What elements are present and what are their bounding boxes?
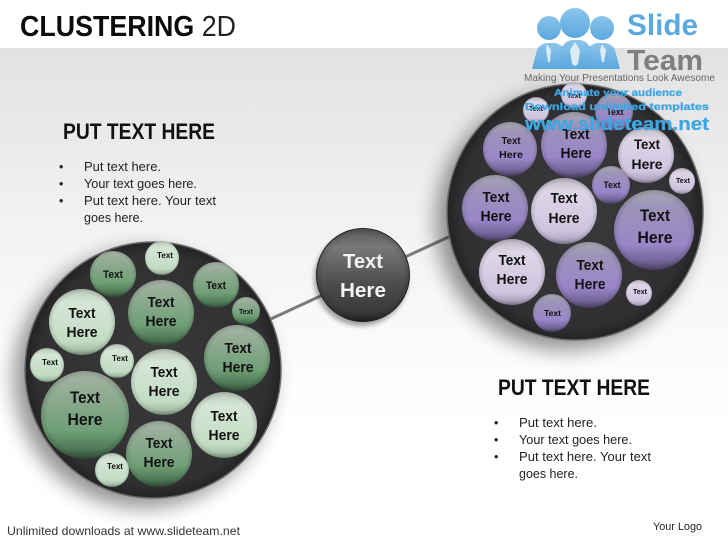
bubble: Text <box>562 126 590 143</box>
bubble: Here <box>68 410 102 429</box>
bubble: Text <box>640 206 670 225</box>
bubble <box>131 349 197 415</box>
bullet list: • <box>494 433 498 447</box>
bubble: Here <box>499 149 523 161</box>
bubble: Text <box>676 176 690 185</box>
bullet list: Put text here. <box>519 416 597 430</box>
bubble <box>523 97 549 123</box>
bubble <box>533 294 571 332</box>
hub circle: Here <box>340 280 386 302</box>
bubble: Text <box>112 353 128 363</box>
bubble: Text <box>502 135 521 147</box>
bubble: Text <box>633 287 647 296</box>
bullet list: Your text goes here. <box>519 433 632 447</box>
watermark text: Animate your audience <box>554 87 682 99</box>
bubble <box>128 280 194 346</box>
bubble <box>204 325 270 391</box>
bubble <box>592 166 630 204</box>
bubble: Here <box>496 271 528 288</box>
bubble: Here <box>632 156 663 172</box>
bubble: Here <box>548 210 580 227</box>
bubble: Here <box>574 276 606 293</box>
bullet list: Your text goes here. <box>84 177 197 191</box>
bubble <box>126 421 192 487</box>
bubble <box>95 453 129 487</box>
bubble <box>561 82 587 108</box>
bubble <box>483 122 537 176</box>
heading: PUT TEXT HERE <box>63 119 215 144</box>
bubble: Here <box>148 383 180 400</box>
watermark text <box>524 87 709 134</box>
bubble: Text <box>103 269 123 281</box>
bubble: Text <box>210 408 238 425</box>
bubble <box>626 280 652 306</box>
bubble: Text <box>68 305 96 322</box>
bubble <box>41 371 129 459</box>
tray shadow <box>436 92 694 350</box>
bullet list: goes here. <box>519 467 578 481</box>
bubble: Text <box>150 364 178 381</box>
bubble <box>669 168 695 194</box>
bullet list: • <box>494 450 498 464</box>
bubble <box>232 297 260 325</box>
bubble: Here <box>146 313 176 330</box>
bubble: Here <box>638 228 672 247</box>
tray disc <box>447 84 703 340</box>
bullet list: Put text here. Your text <box>84 194 217 208</box>
bubble: Text <box>146 435 172 452</box>
tray shadow <box>14 250 272 508</box>
Slide Team logo <box>524 8 715 84</box>
bubble: Text <box>206 280 226 292</box>
watermark text: www.slideteam.net <box>524 114 709 134</box>
bullet list <box>59 160 217 225</box>
footer note: Unlimited downloads at www.slideteam.net <box>7 524 241 538</box>
bubble: Text <box>576 257 604 274</box>
bubble <box>595 93 633 131</box>
bubble: Text <box>157 250 173 260</box>
bubble <box>193 262 239 308</box>
watermark text: Download unlimited templates <box>525 101 709 113</box>
bubble <box>30 348 64 382</box>
your logo label: Your Logo <box>653 521 702 533</box>
bubble: Text <box>544 308 561 318</box>
bubble: Text <box>224 340 252 357</box>
bullet list: • <box>59 194 63 208</box>
Slide Team logo: Team <box>627 45 703 77</box>
bullet list: • <box>59 177 63 191</box>
bubble: Here <box>560 145 592 162</box>
logo wordmark: Slide <box>627 9 698 42</box>
bubble: Text <box>42 357 58 367</box>
bullet list: goes here. <box>84 211 143 225</box>
bubble <box>479 239 545 305</box>
bubble: Text <box>239 307 253 316</box>
bubble: Text <box>634 136 660 152</box>
bubble: Text <box>70 388 100 407</box>
bubble: Text <box>148 294 174 311</box>
bubble: Here <box>222 359 254 376</box>
bubble <box>462 175 528 241</box>
bubble: Here <box>480 208 512 225</box>
tray disc <box>25 242 281 498</box>
bubble <box>618 127 674 183</box>
bullet list: Put text here. Your text <box>519 450 652 464</box>
bullet list: Put text here. <box>84 160 161 174</box>
bubble: Here <box>208 427 240 444</box>
bubble: Text <box>498 252 526 269</box>
bubble <box>614 190 694 270</box>
bubble: Text <box>482 189 510 206</box>
bubble: Text <box>529 104 543 113</box>
bubble: Text <box>604 180 620 190</box>
bullet list: • <box>494 416 498 430</box>
title: CLUSTERING 2D <box>20 11 236 43</box>
cluster: purple tray <box>436 82 703 350</box>
heading: PUT TEXT HERE <box>498 375 650 400</box>
text block: right <box>494 375 652 481</box>
bubble <box>100 344 134 378</box>
bubble: Text <box>550 190 578 207</box>
bubble <box>556 242 622 308</box>
icon: three people <box>532 8 620 69</box>
bubble <box>145 241 179 275</box>
text block: left <box>59 119 217 225</box>
bubble <box>49 289 115 355</box>
bubble: Here <box>144 454 174 471</box>
bullet list <box>494 416 652 481</box>
bubble <box>531 178 597 244</box>
hub circle: Text <box>343 251 383 273</box>
bubble <box>90 251 136 297</box>
cluster: green tray <box>14 241 281 508</box>
bubble <box>191 392 257 458</box>
bubble: Text <box>567 91 581 100</box>
bubble: Here <box>66 324 98 341</box>
bubble: Text <box>107 461 123 471</box>
connector line <box>262 234 455 323</box>
hub circle <box>314 228 410 326</box>
bubble: Text <box>606 107 624 117</box>
bullet list: • <box>59 160 63 174</box>
bubble <box>541 112 607 178</box>
logo tagline: Making Your Presentations Look Awesome <box>524 73 715 84</box>
